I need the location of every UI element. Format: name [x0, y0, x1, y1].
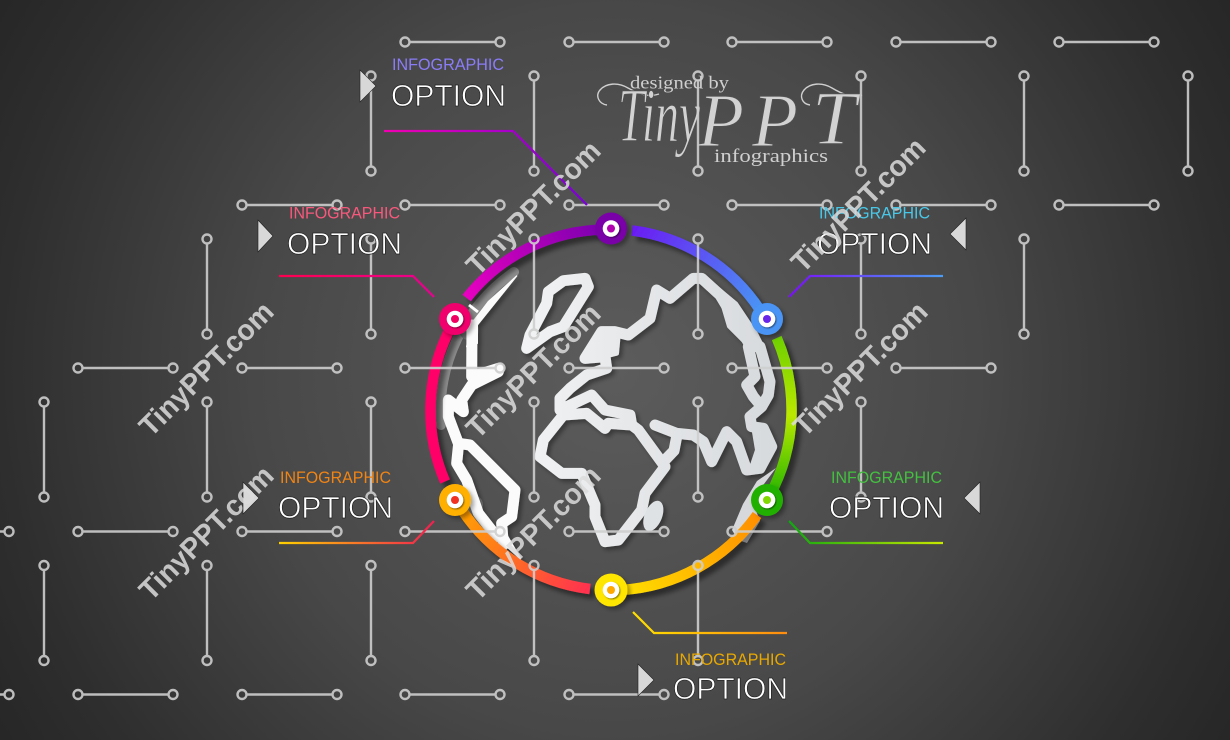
icon: Siberia — [707, 278, 763, 347]
label large: OPTION — [391, 78, 506, 113]
leader line — [279, 521, 434, 543]
watermarks: TinyPPT.com — [133, 296, 280, 443]
logo: designed by TinyPPT infographics: P — [751, 79, 798, 163]
arrow — [638, 664, 654, 696]
leader line — [279, 276, 434, 297]
option label: lower left — [243, 469, 434, 543]
watermarks: TinyPPT.com — [787, 296, 934, 443]
option label: upper left — [258, 204, 434, 297]
watermarks: TinyPPT.com — [460, 460, 607, 607]
label small: INFOGRAPHIC — [819, 204, 930, 222]
icon: Greenland — [527, 278, 588, 348]
icon: Arabia and South Asia — [655, 347, 772, 470]
node: lower left amber — [439, 484, 471, 516]
watermarks: TinyPPT.com — [460, 298, 607, 445]
tick near upper left node — [469, 305, 478, 312]
leader line — [789, 276, 943, 297]
node: upper left pink — [439, 303, 471, 335]
node: bottom yellow — [594, 574, 628, 606]
label large: OPTION — [673, 671, 788, 706]
icon: Blob around Scandinavia — [590, 335, 618, 360]
node: upper right blue — [751, 303, 783, 335]
leader line — [633, 612, 787, 633]
label large: OPTION — [829, 490, 944, 525]
logo: designed by TinyPPT infographics: designed by — [630, 72, 729, 92]
node: top purple — [595, 212, 627, 244]
icon: Americas — [448, 276, 520, 558]
logo: designed by TinyPPT infographics: P — [697, 79, 744, 163]
icon: Madagascar — [639, 498, 667, 534]
leader line — [384, 131, 587, 205]
node: lower right green — [751, 484, 783, 516]
arrow — [243, 482, 259, 514]
label small: INFOGRAPHIC — [289, 204, 400, 222]
ring: six coloured segments — [430, 230, 792, 590]
arrow — [360, 70, 376, 102]
label large: OPTION — [287, 226, 402, 261]
arrow — [258, 220, 273, 252]
watermarks: TinyPPT.com — [133, 460, 280, 607]
option label: bottom — [633, 612, 788, 706]
label small: INFOGRAPHIC — [675, 651, 786, 669]
logo: designed by TinyPPT infographics: infographics — [714, 146, 828, 167]
label small: INFOGRAPHIC — [831, 469, 942, 487]
watermarks: TinyPPT.com — [460, 135, 607, 282]
arrow — [950, 218, 966, 250]
option label: top left — [360, 56, 587, 205]
globe: world map outline — [448, 276, 772, 558]
logo: designed by TinyPPT infographics — [598, 72, 862, 167]
leader line — [789, 521, 943, 543]
label large: OPTION — [278, 490, 393, 525]
logo: designed by TinyPPT infographics: T — [812, 77, 861, 161]
label large: OPTION — [817, 226, 932, 261]
option label: upper right — [789, 204, 966, 297]
icon: Eurasia and Africa — [527, 278, 772, 542]
icon: north coast — [540, 278, 750, 542]
watermarks: TinyPPT.com — [785, 132, 932, 279]
label small: INFOGRAPHIC — [392, 56, 504, 74]
label small: INFOGRAPHIC — [280, 469, 391, 487]
option label: lower right — [789, 469, 980, 543]
watermarks — [133, 132, 934, 607]
wedge: lower right landmass — [732, 468, 776, 543]
icon: South-East Asia — [750, 430, 771, 470]
logo: designed by TinyPPT infographics: Tiny — [618, 74, 700, 158]
ring inner gray reflection — [441, 272, 514, 510]
arrow — [964, 482, 980, 514]
